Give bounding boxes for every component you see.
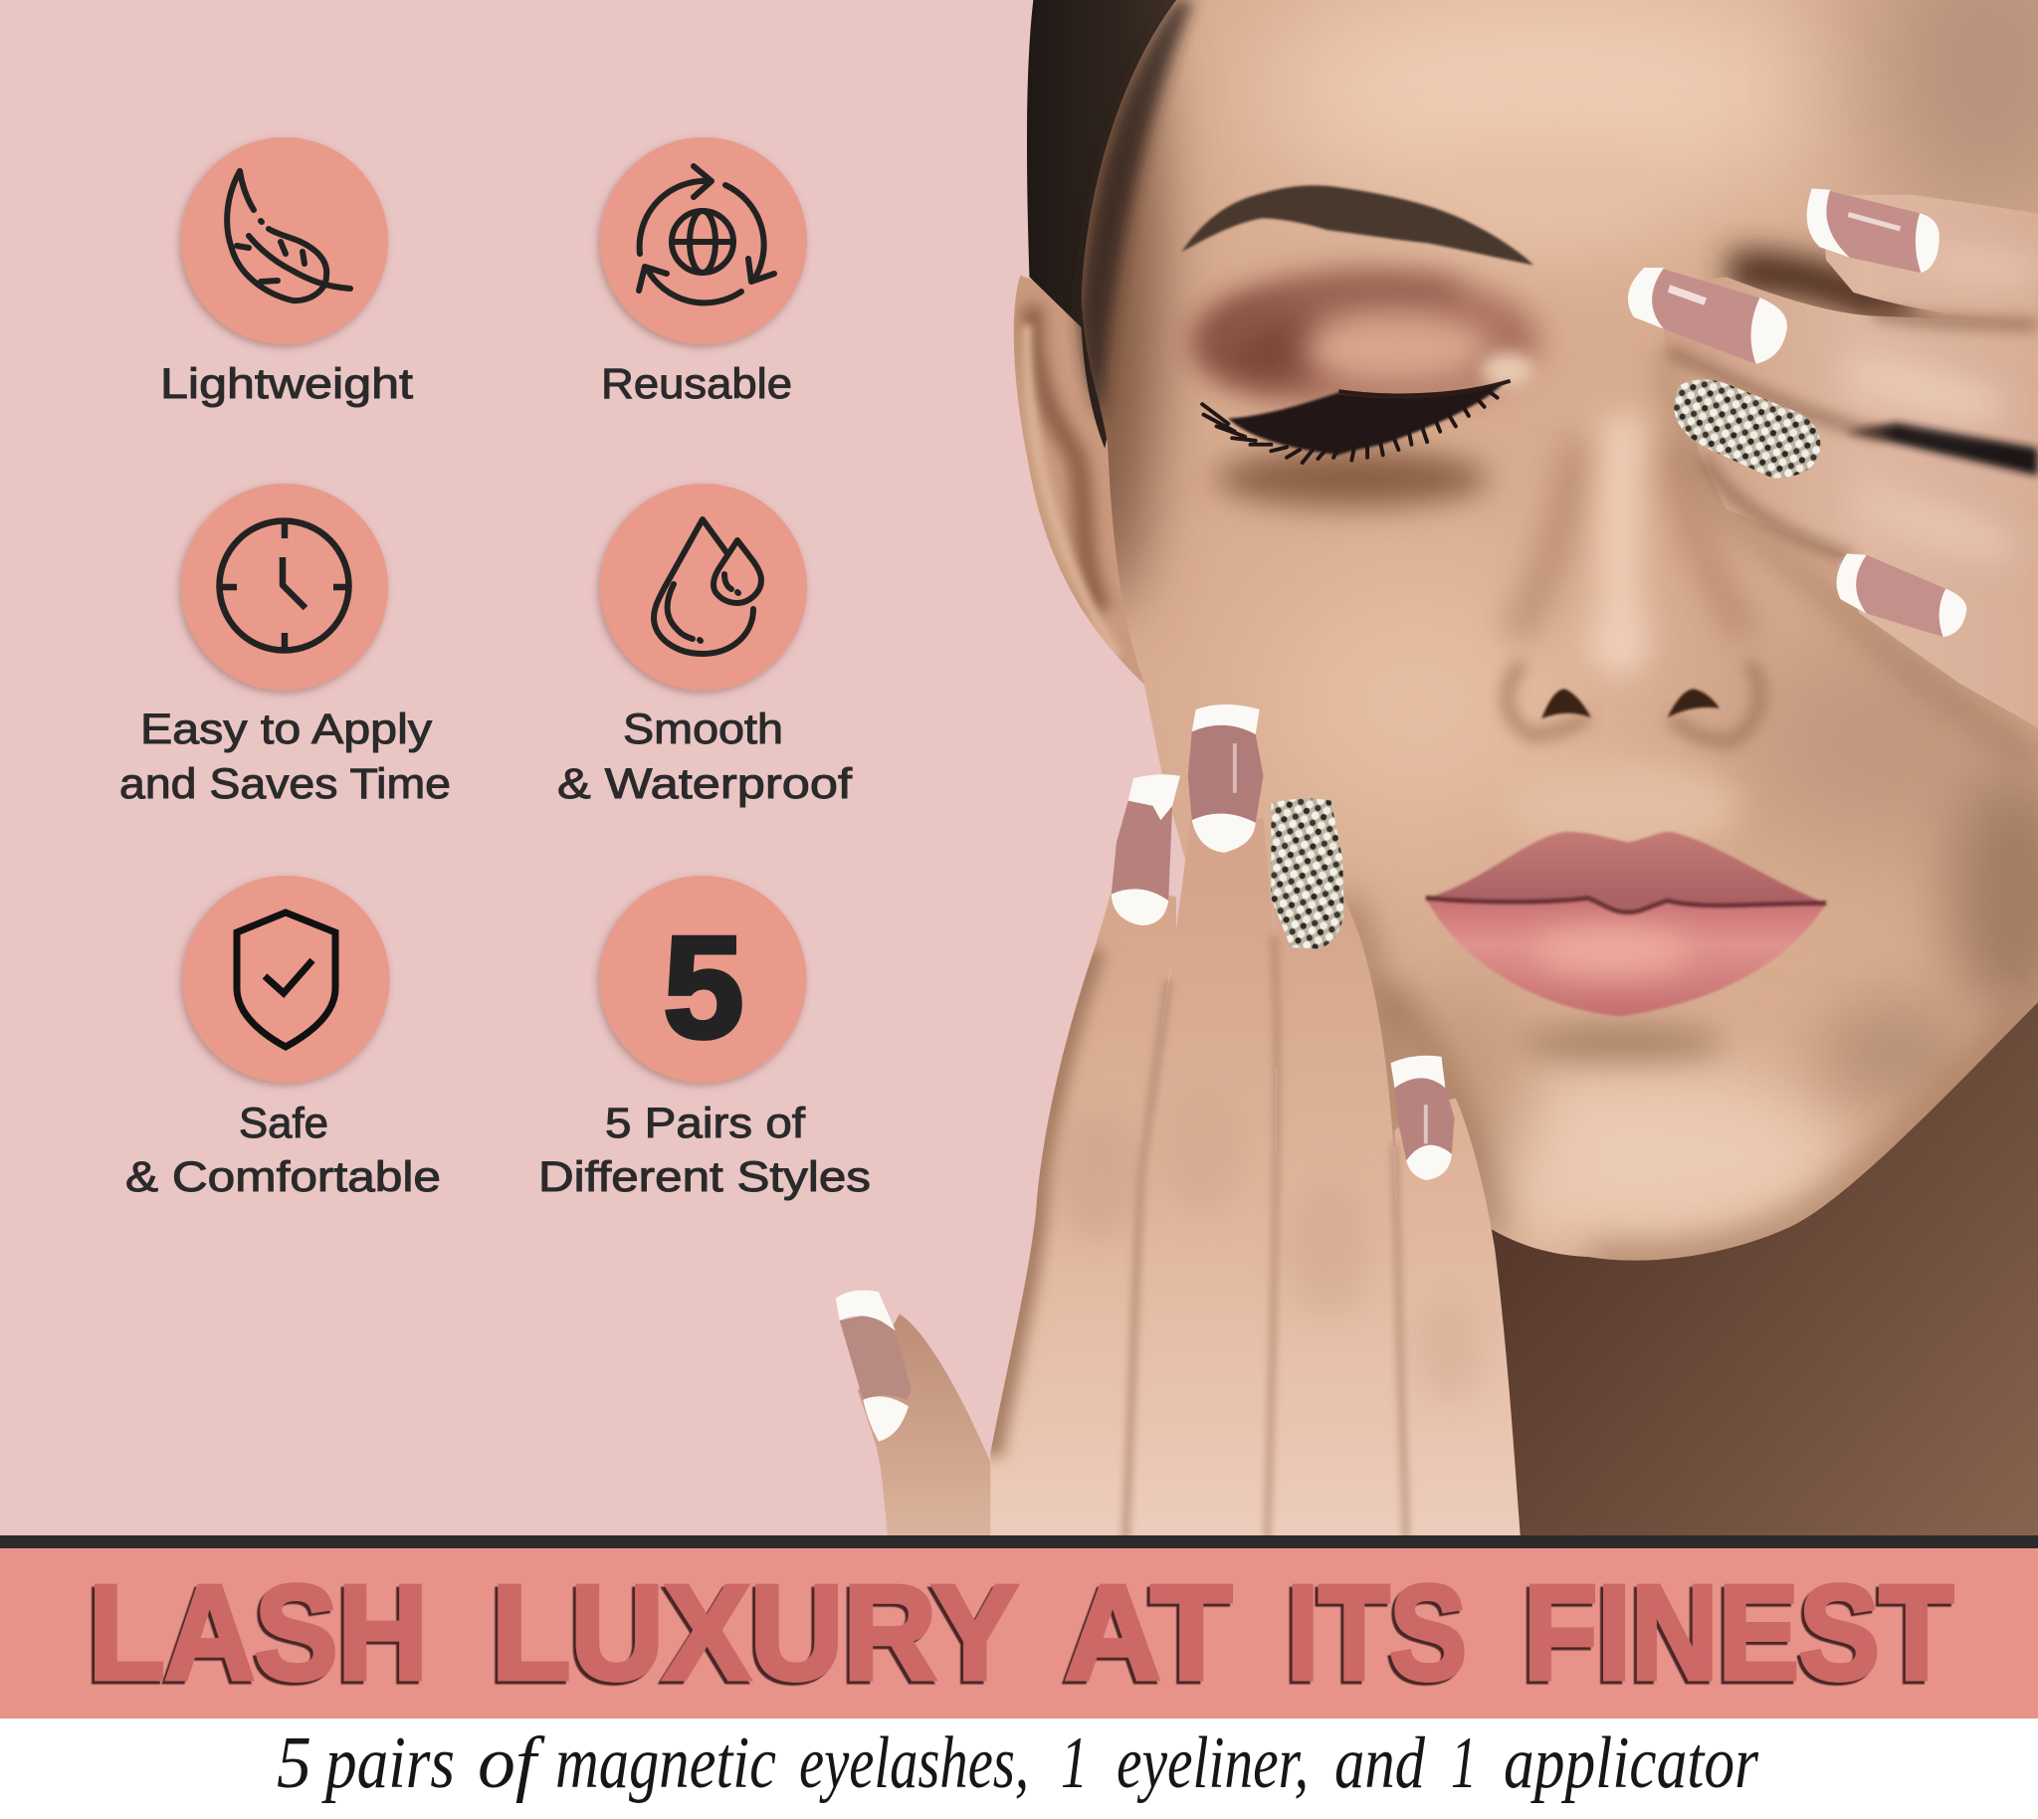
shadow cast by right hand [1666, 272, 2038, 760]
eyelashes [1202, 381, 1511, 463]
subtitle: 1 [1061, 1722, 1088, 1804]
subtitle: pairs [321, 1722, 455, 1804]
nail: index [1112, 774, 1180, 925]
photo: woman with closed eye and hands on face [836, 0, 2038, 1546]
left hand fingers [990, 819, 1521, 1541]
hand shading [990, 935, 1482, 1540]
headline: FINEST [1524, 1557, 1953, 1708]
label: Easy to Apply [140, 706, 433, 753]
subtitle: and [1334, 1722, 1426, 1804]
eyebrow [1181, 185, 1533, 265]
finger: third [1690, 416, 2038, 613]
neck [1469, 910, 2038, 1546]
icon: clock [219, 521, 348, 651]
finger: ring [1267, 845, 1406, 1541]
label line 2: & Comfortable [125, 1153, 441, 1201]
nail: thumb [836, 1291, 912, 1441]
icon: feather [227, 171, 350, 301]
label: 5 Pairs of [605, 1100, 806, 1147]
subtitle strip [0, 1719, 2038, 1819]
badge circle [599, 876, 806, 1083]
feature: safe and comfortable [125, 876, 441, 1201]
label line 2: Different Styles [538, 1153, 871, 1201]
finger: middle [1125, 819, 1276, 1541]
right hand fingers [1657, 195, 2038, 727]
nose [1508, 416, 1760, 743]
feature: five pairs of different styles [538, 876, 871, 1201]
badge circle [600, 137, 807, 344]
label: Safe [239, 1100, 328, 1147]
dark divider bar [0, 1535, 2038, 1548]
face skin [1040, 0, 2038, 1300]
label: Lightweight [160, 360, 413, 408]
nail: gem finger [1674, 379, 1820, 479]
nail: second finger [1628, 268, 1787, 364]
label: Reusable [601, 360, 792, 408]
nail: ring gem [1271, 798, 1344, 948]
finger: fourth [1835, 555, 2038, 727]
headline: LASH [89, 1557, 428, 1708]
nail: top right finger [1807, 188, 1939, 273]
finger: pinky [1394, 1099, 1521, 1541]
feature: easy to apply [119, 484, 451, 808]
subtitle: eyeliner, [1117, 1722, 1309, 1804]
nail: middle [1188, 705, 1264, 853]
lips [1426, 832, 1826, 1016]
subtitle: 1 [1451, 1722, 1477, 1804]
label line 2: & Waterproof [557, 760, 853, 808]
headline band [0, 1548, 2038, 1719]
subtitle [277, 1722, 1759, 1804]
icon: globe with recycling arrows [639, 166, 774, 303]
ear [1013, 276, 1144, 685]
nail: fourth finger [1836, 553, 1966, 637]
feature: lightweight [160, 137, 413, 408]
finger: index [990, 884, 1176, 1541]
label: Smooth [623, 706, 783, 753]
label line 2: and Saves Time [119, 760, 451, 808]
subtitle: of [478, 1722, 546, 1804]
icon: shield with check [237, 912, 335, 1047]
badge circle [600, 484, 807, 691]
subtitle: applicator [1504, 1722, 1759, 1804]
headline [89, 1557, 1953, 1708]
subtitle: 5 [277, 1722, 311, 1804]
icon: number 5: 5 [664, 907, 743, 1068]
hair [1027, 0, 1202, 449]
subtitle: magnetic [555, 1722, 776, 1804]
eye shadow [1189, 273, 1540, 408]
finger: second [1657, 277, 2038, 466]
feature: reusable [600, 137, 807, 408]
feature: smooth and waterproof [557, 484, 853, 808]
badge circle [181, 484, 388, 691]
badge circle [183, 876, 390, 1083]
left hand thumb [858, 1314, 993, 1540]
finger: top [1820, 195, 2038, 325]
headline: ITS [1287, 1557, 1467, 1708]
nail: pinky [1391, 1056, 1455, 1180]
subtitle: eyelashes, [799, 1722, 1029, 1804]
icon: water drops [654, 519, 761, 654]
headline: LUXURY [492, 1557, 1018, 1708]
hair strands over temple [1079, 0, 1193, 419]
headline: AT [1065, 1557, 1232, 1708]
badge circle [181, 137, 388, 344]
